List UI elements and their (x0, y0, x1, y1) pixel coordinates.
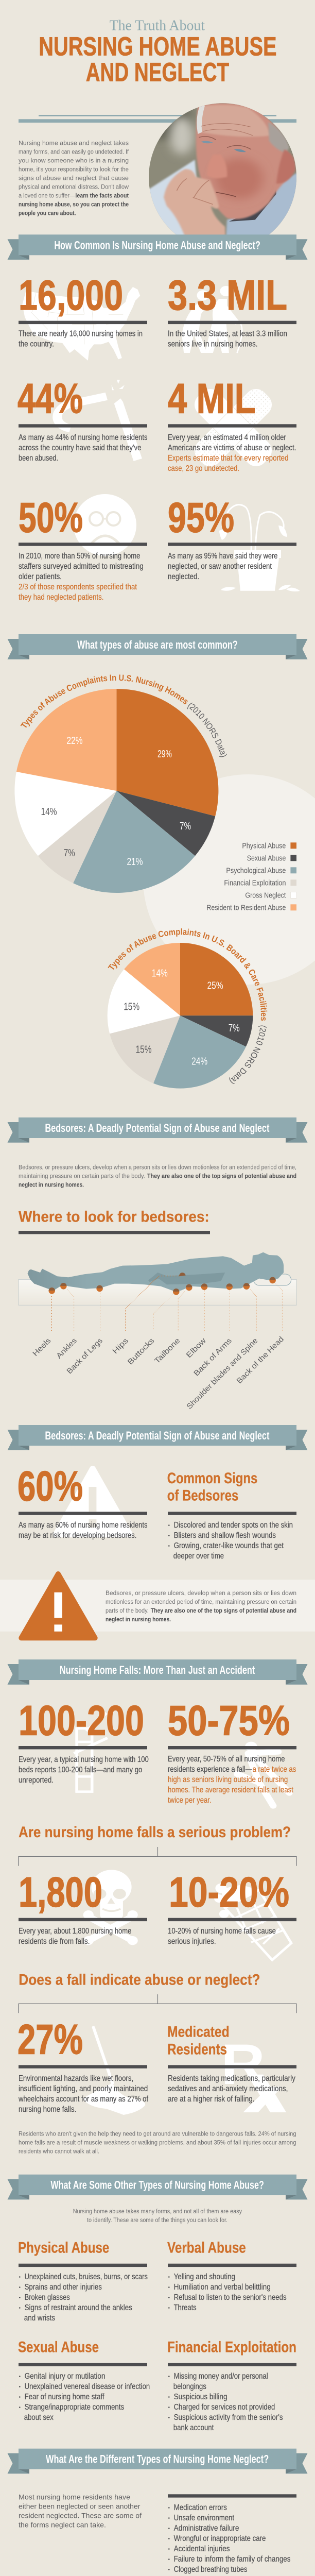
list: forms of neglect: Accidental injuries (174, 2545, 230, 2553)
body part labels: Hips (111, 1336, 130, 1355)
text block: vulnerable residents (19, 2131, 296, 2155)
legend: Sexual Abuse (247, 854, 286, 863)
text block: vulnerable residents: Residents who aren't given the help they need to get around are vulnerable to dangerous falls. 24% of nursing (19, 2131, 296, 2137)
panel: 27% environmental hazards: 27% (18, 2016, 83, 2063)
panel: verbal abuse: Refusal to listen to the senior's needs (174, 2293, 287, 2302)
pie chart: types of abuse complaints in nursing homes: Types of Abuse Complaints In U.S. Nursing Homes (21, 674, 187, 727)
panel: 16,000 nursing homes: 16,000 (19, 272, 123, 319)
intro text: other types: to identify. These are some of the things you can look for. (87, 2217, 227, 2224)
body part labels: Elbow (185, 1336, 208, 1360)
callout band: warning: Bedsores, or pressure ulcers, develop when a person sits or lies down (106, 1590, 296, 1597)
intro text block: Nursing home abuse and neglect takes (19, 141, 129, 147)
text block: vulnerable residents: home falls are a result of muscle weakness or walking problems, and about 35% of fall injuries occur among (19, 2140, 296, 2146)
pie chart: types of abuse complaints in nursing homes (14, 674, 227, 893)
panel: 27% environmental hazards: wheelchairs account for as many as 27% of (18, 2095, 148, 2104)
panel: 3.3 million seniors: seniors live in nursing homes. (168, 340, 257, 349)
title (39, 18, 277, 87)
bedsores intro text: They are also one of the top signs of potential abuse and (147, 1173, 296, 1179)
panel: 16,000 nursing homes (19, 272, 147, 361)
icon: bandage (190, 384, 276, 471)
panel: physical abuse: and wrists (24, 2314, 55, 2323)
icon: Rx symbol: R (221, 2033, 265, 2096)
panel: common signs of bedsores: of Bedsores (167, 1487, 238, 1504)
panel: 50% staffers: older patients. (19, 572, 62, 581)
panel: 27% environmental hazards: insufficient lighting, and poorly maintained (19, 2084, 148, 2093)
intro text block: physical and emotional distress. Don't allow (19, 184, 129, 191)
panel: medicated residents: Residents (167, 2041, 227, 2058)
bedsores intro text (19, 1164, 296, 1188)
body part labels: Shoulder blades and Spine (185, 1336, 259, 1411)
body part labels (31, 1335, 286, 1411)
panel: sexual abuse: about sex (24, 2413, 54, 2422)
legend: Physical Abuse (242, 842, 286, 851)
text block: neglect intro: resident neglected. These are some of (19, 2512, 142, 2520)
panel: sexual abuse: Fear of nursing home staff (25, 2393, 104, 2401)
pie chart: types of abuse complaints in board and care facilities (107, 928, 268, 1089)
legend: Resident to Resident Abuse (206, 904, 286, 912)
body part labels: Tailbone (153, 1336, 182, 1365)
bracket connector (19, 1847, 296, 1866)
pie chart: types of abuse complaints in nursing homes: 29% (157, 749, 172, 760)
intro text block: a loved one to suffer— (19, 193, 75, 199)
heading: where to look for bedsores: Where to look for bedsores: (19, 1209, 209, 1226)
heading: where to look for bedsores (19, 1209, 210, 1234)
ribbon heading: bedsores second (7, 1425, 308, 1450)
panel: financial exploitation: bank account (173, 2424, 214, 2432)
intro text block: home, it's your responsibility to look for the (19, 167, 129, 173)
panel: 44% abused: been abused. (19, 454, 58, 463)
pie chart: types of abuse complaints in nursing homes: 21% (127, 856, 143, 868)
panel: 4 million victims: Experts estimate that for every reported (168, 454, 288, 463)
callout band: warning: They are also one of the top signs of potential abuse and (151, 1608, 296, 1614)
list: forms of neglect: Administrative failure (174, 2524, 239, 2533)
panel: 100-200 falls (19, 1698, 149, 1792)
panel: 1,800 deaths (19, 1869, 147, 1946)
pie chart: types of abuse complaints in nursing homes: 7% (180, 821, 191, 832)
panel: 10-20% serious injuries: 10-20% (169, 1869, 289, 1916)
panel: 4 million victims: 4 MIL (168, 376, 255, 422)
panel: verbal abuse: Humiliation and verbal belittling (174, 2283, 271, 2292)
title: The Truth About (110, 18, 205, 33)
panel: financial exploitation: Charged for services not provided (174, 2403, 275, 2412)
legend: Psychological Abuse (226, 867, 286, 875)
pie chart: types of abuse complaints in board and care facilities: 7% (229, 1023, 240, 1034)
panel: financial exploitation (167, 2339, 296, 2432)
panel: 16,000 nursing homes: the country. (19, 340, 54, 349)
body part labels: Back of Arms (192, 1336, 234, 1378)
panel: 50% staffers: they had neglected patients. (19, 593, 103, 602)
panel: 10-20% serious injuries: 10-20% of nursing home falls cause (168, 1927, 276, 1936)
bedsores intro text: neglect in nursing homes. (19, 1182, 84, 1188)
pillow (254, 1274, 291, 1285)
text block: neglect intro: the forms neglect can take. (19, 2521, 106, 2529)
bracket connector (19, 1994, 296, 2013)
title divider lines (19, 115, 296, 123)
panel: common signs of bedsores: Common Signs (167, 1470, 257, 1487)
panel: medicated residents: are at a higher risk of falling. (168, 2095, 254, 2104)
panel: 27% environmental hazards (18, 2016, 148, 2115)
pie chart: types of abuse complaints in nursing homes: 22% (67, 735, 83, 747)
panel: 3.3 million seniors: 3.3 MIL (168, 272, 287, 319)
intro text: other types (73, 2209, 242, 2224)
legend (206, 842, 296, 912)
list: forms of neglect: Wrongful or inappropriate care (174, 2534, 266, 2543)
panel: common signs of bedsores: Blisters and shallow flesh wounds (174, 1531, 276, 1540)
icon: Rx symbol (221, 2033, 286, 2112)
ribbon heading: types of abuse: What types of abuse are most common? (77, 638, 238, 651)
panel: physical abuse (18, 2239, 148, 2323)
legend: Financial Exploitation (224, 879, 286, 888)
dotted leader lines (51, 1276, 282, 1331)
body part labels: Heels (31, 1336, 52, 1358)
list: forms of neglect (168, 2494, 296, 2576)
list: forms of neglect: Medication errors (174, 2503, 227, 2512)
legend: Gross Neglect (245, 891, 286, 900)
intro text block: many forms, and can easily go undetected. If (19, 149, 129, 156)
pie chart: types of abuse complaints in nursing homes: (2010 NORS Data) (187, 703, 227, 757)
panel: 50-75% of residents fall: 50-75% (168, 1698, 290, 1744)
intro text block: learn the facts about (75, 193, 129, 199)
panel: 16,000 nursing homes: There are nearly 16,000 nursing homes in (19, 330, 143, 338)
intro text block: you know someone who is in a nursing (19, 158, 129, 164)
panel: 3.3 million seniors (168, 272, 296, 353)
pie chart: types of abuse complaints in board and care facilities: 14% (152, 968, 168, 979)
panel: 60% at risk (18, 1463, 147, 1540)
panel: 50-75% of residents fall: a rate twice as (253, 1765, 296, 1774)
diagram: body on mattress with bedsore locations (19, 1252, 296, 1411)
pie chart: types of abuse complaints in board and care facilities: 15% (124, 1001, 139, 1012)
callout band: warning: parts of the body. (106, 1608, 149, 1614)
panel: financial exploitation: Suspicious billing (174, 2393, 227, 2401)
panel: 27% environmental hazards: nursing home falls. (19, 2105, 76, 2114)
panel: medicated residents: sedatives and anti-anxiety medications, (168, 2084, 288, 2093)
list: forms of neglect: Unsafe environment (174, 2514, 234, 2522)
panel: financial exploitation: Suspicious activity from the senior's (174, 2413, 283, 2422)
panel: 50-75% of residents fall (168, 1698, 296, 1806)
icon: elderly couple (182, 286, 242, 353)
panel: 4 million victims (168, 376, 296, 473)
icon: orange warning triangle (21, 1574, 95, 1638)
panel: 50% staffers: In 2010, more than 50% of nursing home (19, 552, 140, 561)
panel: sexual abuse (18, 2339, 150, 2422)
icon: arm in cast (214, 1884, 291, 1960)
panel: verbal abuse: Threats (174, 2303, 197, 2312)
panel: 1,800 deaths: Every year, about 1,800 nursing home (19, 1927, 131, 1936)
pie chart: types of abuse complaints in board and care facilities: 15% (136, 1044, 152, 1056)
panel: 27% environmental hazards: Environmental hazards like wet floors, (19, 2074, 133, 2083)
panel: 1,800 deaths: 1,800 (19, 1869, 102, 1916)
pie chart: types of abuse complaints in nursing homes: 14% (41, 806, 57, 818)
icon: skull and crossbones (83, 1870, 138, 1945)
ribbon heading: types of neglect (7, 2449, 308, 2473)
panel: common signs of bedsores: deeper over time (173, 1552, 224, 1561)
panel: 100-200 falls: beds reports 100-200 falls—and many go (19, 1766, 142, 1774)
panel: 50-75% of residents fall: residents experience a fall— (168, 1765, 252, 1774)
panel: medicated residents: Residents taking medications, particularly (168, 2074, 295, 2083)
panel: 50% staffers (19, 494, 147, 602)
panel: medicated residents (167, 2023, 296, 2112)
panel: 95% neglected: 95% (168, 494, 234, 541)
panel: 4 million victims: Every year, an estimated 4 million older (168, 433, 286, 442)
pie chart: types of abuse complaints in board and care facilities: Types of Abuse Complaints In U.S. Board & Care Facilities (108, 928, 268, 1021)
intro text block: nursing home abuse, so you can protect the (19, 202, 129, 208)
title: AND NEGLECT (86, 58, 229, 87)
icon: mop and puddle (82, 2027, 145, 2115)
panel: 60% at risk: 60% (18, 1463, 83, 1510)
panel: 100-200 falls: Every year, a typical nursing home with 100 (19, 1755, 149, 1764)
body part labels: Buttocks (126, 1336, 156, 1366)
bedsores intro text: maintaining pressure on certain parts of the body. (19, 1173, 145, 1179)
mattress (19, 1279, 296, 1305)
panel: 50% staffers: staffers surveyed admitted to mistreating (19, 562, 144, 571)
panel: physical abuse: Unexplained cuts, bruises, burns, or scars (25, 2273, 148, 2281)
panel: common signs of bedsores: Growing, crater-like wounds that get (174, 1541, 284, 1550)
body part labels: Back of the Head (235, 1335, 286, 1385)
panel: 100-200 falls: 100-200 (19, 1698, 144, 1744)
panel: financial exploitation: Missing money and/or personal (174, 2372, 268, 2381)
icon: sad face with glasses (74, 494, 136, 556)
icon: falling person (237, 1742, 289, 1806)
list: forms of neglect: Failure to inform the family of changes (174, 2555, 290, 2564)
panel: 95% neglected: As many as 95% have said they were (168, 552, 277, 561)
panel: verbal abuse (167, 2239, 296, 2312)
panel: common signs of bedsores (167, 1470, 296, 1561)
panel: 10-20% serious injuries (168, 1869, 296, 1960)
intro text: other types: Nursing home abuse takes many forms, and not all of them are easy (73, 2209, 242, 2215)
intro text block (19, 141, 129, 217)
panel: 100-200 falls: unreported. (19, 1776, 54, 1785)
icon: broken cane (57, 380, 142, 461)
panel: 44% abused (18, 376, 147, 463)
panel: 50% staffers: 50% (19, 494, 83, 541)
panel: 44% abused: across the country have said that they've (19, 444, 141, 452)
panel: physical abuse: Sprains and other injuries (25, 2283, 102, 2292)
callout band: warning: neglect in nursing homes. (106, 1617, 171, 1623)
ribbon heading: bedsores (7, 1117, 308, 1143)
pie chart: types of abuse complaints in nursing homes: 7% (64, 848, 75, 859)
panel: 3.3 million seniors: In the United States, at least 3.3 million (168, 330, 287, 338)
panel: 10-20% serious injuries: serious injuries. (168, 1937, 216, 1946)
panel: 95% neglected: neglected, or saw another resident (168, 562, 272, 571)
bedsores intro text: Bedsores, or pressure ulcers, develop when a person sits or lies down motionless for an extended period of time, (19, 1164, 296, 1171)
panel: physical abuse: Signs of restraint around the ankles (25, 2303, 132, 2312)
intro text block: signs of abuse and neglect that cause (19, 176, 129, 182)
ribbon heading: falls (7, 1659, 308, 1685)
panel: physical abuse: Physical Abuse (18, 2239, 109, 2256)
panel: common signs of bedsores: Discolored and tender spots on the skin (174, 1521, 293, 1530)
panel: 50-75% of residents fall: high as seniors living outside of nursing (168, 1775, 288, 1784)
pie chart: types of abuse complaints in board and care facilities: 24% (191, 1056, 207, 1067)
panel: sexual abuse: Strange/inappropriate comments (25, 2403, 124, 2412)
panel: 60% at risk: As many as 60% of nursing home residents (19, 1521, 147, 1530)
panel: 60% at risk: may be at risk for developing bedsores. (19, 1531, 136, 1540)
text block: vulnerable residents: residents who cannot walk at all. (19, 2148, 99, 2155)
icon: wilted plant (219, 505, 300, 591)
panel: medicated residents: Medicated (167, 2023, 230, 2040)
list: forms of neglect: Clogged breathing tubes (174, 2565, 247, 2574)
heading: does a fall indicate abuse or neglect: Does a fall indicate abuse or neglect? (19, 1972, 260, 1989)
panel: 44% abused: 44% (18, 376, 83, 422)
panel: 1,800 deaths: residents die from falls. (19, 1937, 90, 1946)
body part labels: Back of Legs (65, 1336, 104, 1376)
intro text block: people you care about. (19, 211, 76, 217)
panel: 50-75% of residents fall: twice per year. (168, 1796, 212, 1805)
icon: fallen walker (74, 1713, 108, 1792)
panel: 95% neglected: neglected. (168, 572, 199, 581)
panel: verbal abuse: Verbal Abuse (167, 2239, 246, 2256)
panel: physical abuse: Broken glasses (25, 2293, 70, 2302)
ribbon heading: other types of abuse (7, 2175, 308, 2199)
panel: 50-75% of residents fall: Every year, 50-75% of all nursing home (168, 1755, 285, 1764)
icon: US map (22, 287, 140, 361)
ribbon heading: how common (7, 234, 308, 260)
callout band: warning (0, 1574, 315, 1638)
panel: 44% abused: As many as 44% of nursing home residents (19, 433, 147, 442)
text block: neglect intro: either been neglected or seen another (19, 2502, 141, 2511)
icon: white warning triangle (56, 1469, 130, 1534)
pie chart: types of abuse complaints in board and care facilities: 25% (207, 980, 223, 991)
legend backdrop circle (143, 774, 315, 985)
panel: verbal abuse: Yelling and shouting (174, 2273, 235, 2281)
body silhouette (27, 1252, 284, 1295)
photo: elderly man (149, 103, 296, 235)
panel: 50% staffers: 2/3 of those respondents specified that (19, 583, 137, 591)
callout band: warning: motionless for an extended period of time, maintaining pressure on certain (106, 1599, 296, 1605)
panel: 95% neglected (168, 494, 300, 591)
panel: 4 million victims: case, 23 go undetected. (168, 464, 239, 473)
text block: neglect intro: Most nursing home residents have (19, 2493, 130, 2501)
panel: sexual abuse: Unexplained venereal disease or infection (25, 2382, 150, 2391)
pie chart: types of abuse complaints in board and care facilities: (2010 NORS Data) (229, 1025, 267, 1084)
panel: sexual abuse: Genital injury or mutilation (25, 2372, 105, 2381)
panel: financial exploitation: belongings (173, 2382, 206, 2391)
ribbon heading: types of abuse (7, 634, 308, 659)
body part labels: Ankles (55, 1336, 79, 1360)
panel: sexual abuse: Sexual Abuse (18, 2339, 99, 2356)
text block: neglect intro (19, 2493, 142, 2529)
